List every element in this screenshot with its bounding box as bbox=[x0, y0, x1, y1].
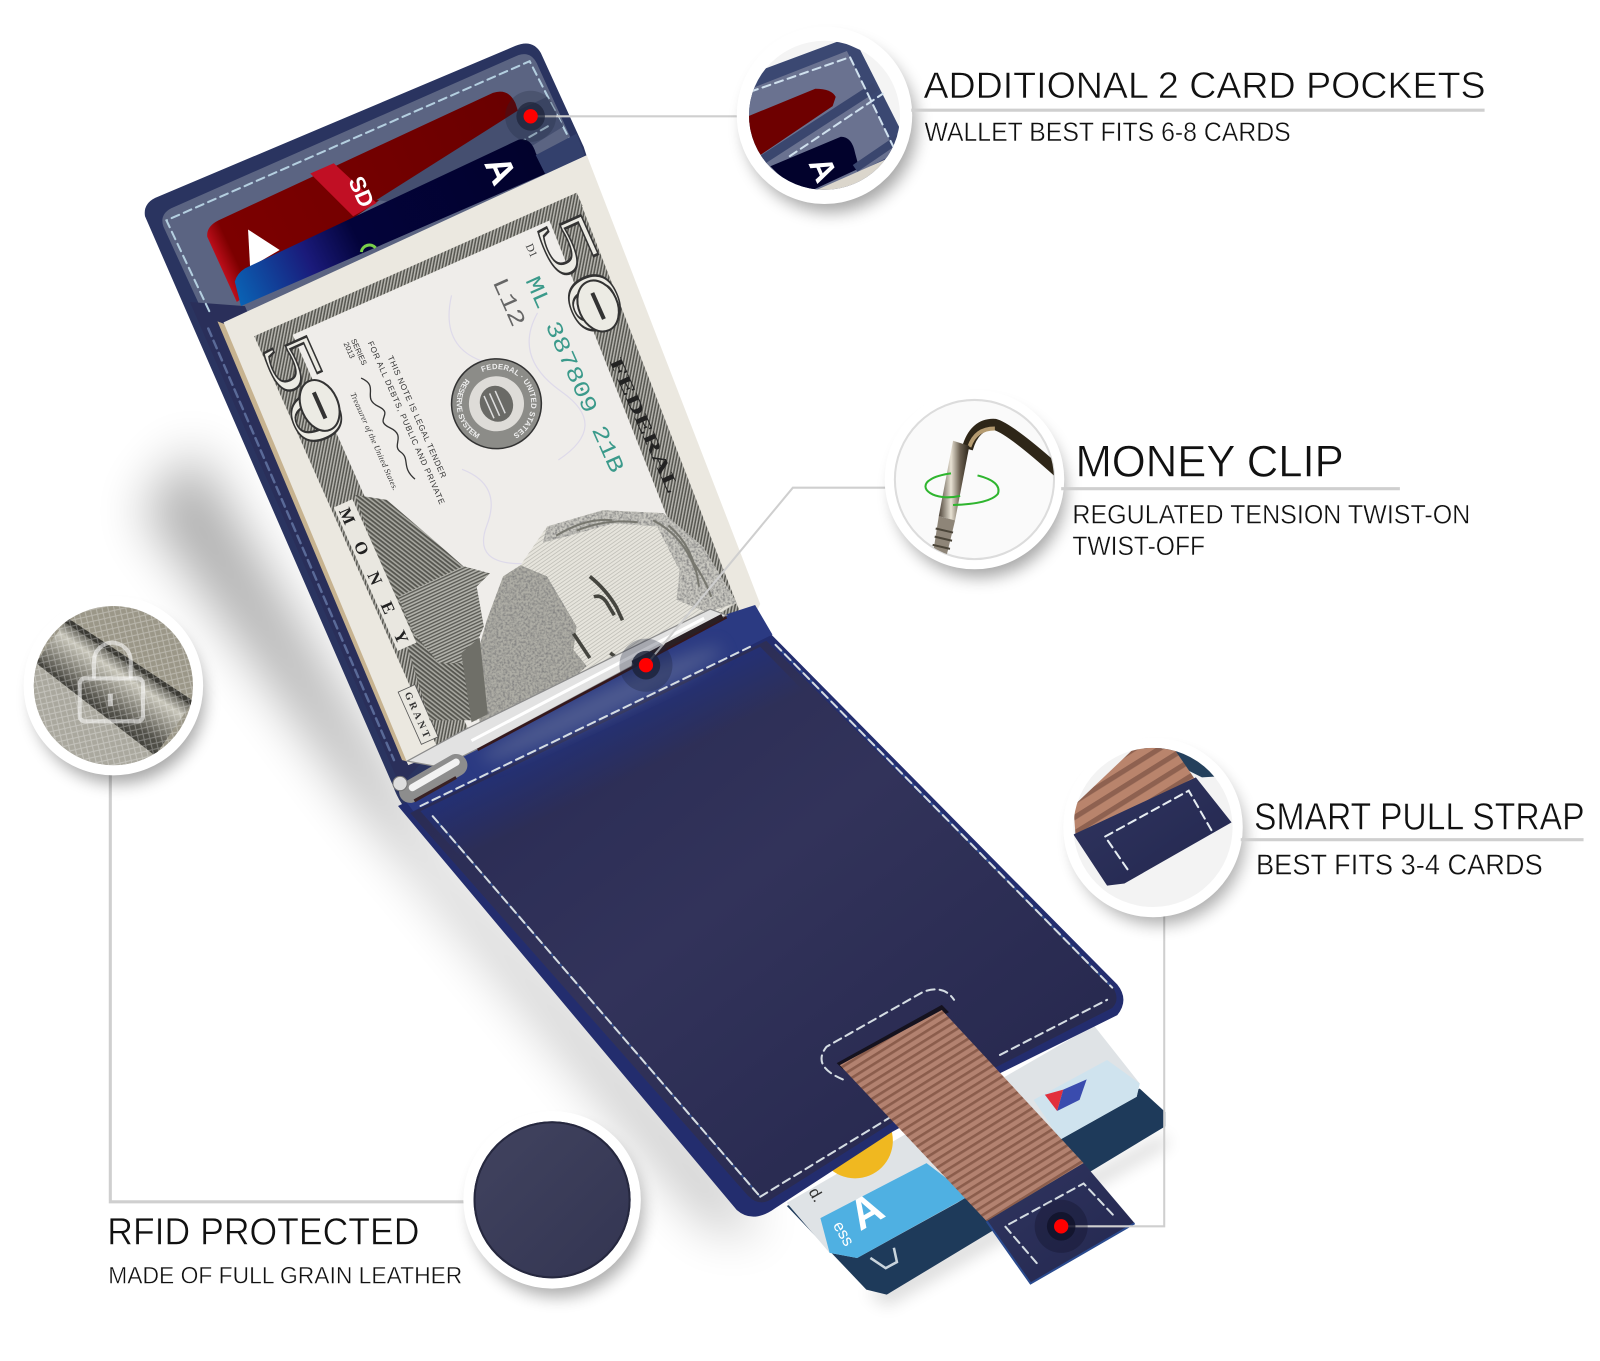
signature bbox=[361, 374, 417, 482]
pale blue band right bbox=[1034, 1060, 1140, 1140]
connector line: pull strap bbox=[1061, 908, 1164, 1226]
portrait coat bbox=[355, 495, 490, 720]
navy card bbox=[235, 139, 546, 306]
series: 2013 bbox=[342, 341, 357, 360]
portrait face bbox=[475, 510, 737, 723]
callout circle: card pockets bbox=[737, 27, 916, 212]
legal tender line 2: FOR ALL DEBTS, PUBLIC AND PRIVATE bbox=[366, 340, 446, 506]
bottom stitching bbox=[760, 1000, 1107, 1197]
district mark: D1 bbox=[523, 242, 539, 259]
money word strip over coat edge: MONEY bbox=[335, 505, 412, 647]
portrait beard bbox=[479, 565, 587, 722]
lower pocket strip bbox=[536, 134, 585, 175]
federal lettering: FEDERAL bbox=[606, 355, 683, 496]
red marker: money clip bbox=[619, 639, 672, 692]
connector line: money clip bbox=[646, 488, 888, 665]
outer leather shell bbox=[145, 44, 612, 816]
heading: money clip: MONEY CLIP bbox=[1075, 435, 1344, 486]
seal bbox=[450, 358, 542, 450]
header rule: money clip bbox=[1061, 487, 1400, 490]
heading: RFID protected: RFID PROTECTED bbox=[107, 1211, 419, 1253]
pull strap bbox=[840, 1010, 1135, 1283]
flag mark bbox=[1045, 1079, 1087, 1111]
large numeral top: 50 bbox=[520, 199, 644, 348]
dark card glyph bbox=[870, 1248, 897, 1268]
red marker: pull strap bbox=[1035, 1200, 1088, 1253]
connector line: RFID protection bbox=[110, 765, 471, 1202]
callout circle: leather swatch bbox=[463, 1111, 643, 1297]
front panel of wallet bbox=[393, 605, 1123, 1217]
pocket stitching bbox=[449, 124, 551, 184]
credit cards under wallet bbox=[787, 1025, 1165, 1295]
inner lining bbox=[162, 54, 578, 337]
red card stripe bbox=[310, 163, 377, 216]
card small text: ess bbox=[829, 1218, 857, 1249]
portrait hair bbox=[543, 510, 736, 611]
strap tab bbox=[987, 1163, 1135, 1283]
left leather strip bbox=[190, 302, 429, 786]
strap tab edge bbox=[987, 1221, 1135, 1283]
green rotation arrow bbox=[925, 473, 999, 505]
left engraved band bbox=[254, 322, 470, 748]
panel edge bbox=[398, 631, 1123, 1217]
serial number: ML 387809 21B bbox=[519, 273, 629, 477]
navy card green mark bbox=[361, 245, 376, 252]
subtext: regulated tension: REGULATED TENSION TWIST-ON bbox=[1072, 499, 1470, 529]
money clip bar bbox=[393, 609, 727, 801]
callout circle: lock RFID shield bbox=[24, 596, 204, 784]
upper pocket band bbox=[377, 97, 563, 204]
portrait eye and brow bbox=[574, 576, 622, 659]
wallet drop shadow bbox=[143, 449, 1169, 1306]
portrait lapel bbox=[398, 566, 490, 663]
connector line: card pockets bbox=[531, 115, 739, 117]
red marker: card pockets bbox=[505, 91, 556, 142]
seal: RESERVE SYSTEM bbox=[456, 378, 480, 438]
seal: FEDERAL · UNITED STATES bbox=[481, 364, 536, 438]
callout circle: money clip bbox=[885, 390, 1065, 577]
grant label: GRANT bbox=[402, 691, 432, 740]
red card lettering: SD bbox=[343, 172, 379, 211]
card fragment text: d. bbox=[805, 1185, 827, 1205]
subtext: twist off: TWIST-OFF bbox=[1072, 531, 1205, 561]
watermark lines bbox=[385, 266, 629, 577]
bill paper edge bbox=[217, 321, 413, 763]
grant label bbox=[398, 685, 438, 744]
right side stitching bbox=[776, 645, 1112, 988]
treasurer title: Treasurer of the United States. bbox=[348, 391, 400, 492]
oval on top numeral bbox=[570, 274, 627, 338]
red card logo bbox=[248, 230, 280, 267]
top stitching bbox=[166, 61, 577, 311]
dark card bbox=[787, 1089, 1165, 1295]
header rule: card pockets bbox=[911, 109, 1485, 112]
strap ribbon bbox=[840, 1010, 1084, 1221]
strap tab stitching bbox=[1005, 1183, 1113, 1263]
blue card band left bbox=[820, 1163, 969, 1258]
portrait tie bbox=[461, 638, 488, 722]
callout circle: pull strap bbox=[1063, 738, 1245, 924]
large numeral left: 50 bbox=[246, 321, 364, 458]
subtext: leather: MADE OF FULL GRAIN LEATHER bbox=[108, 1262, 462, 1289]
fifty dollar bill bbox=[218, 155, 760, 766]
red card bbox=[207, 92, 518, 302]
oval on left numeral bbox=[292, 374, 347, 437]
strap slot stitching bbox=[822, 989, 954, 1079]
yellow disc bbox=[817, 1103, 893, 1178]
right engraved band bbox=[527, 193, 760, 627]
letter code: L12 bbox=[486, 274, 530, 331]
bill paper face bbox=[224, 155, 760, 765]
strap slot bbox=[837, 1005, 949, 1069]
left side stitching bbox=[433, 816, 760, 1197]
legal tender line 1: THIS NOTE IS LEGAL TENDER bbox=[386, 354, 448, 479]
left stitching bbox=[208, 329, 394, 760]
top ribbon bbox=[256, 193, 583, 348]
fold stitching bbox=[420, 647, 750, 806]
wallet back panel with pockets bbox=[145, 44, 612, 816]
navy card glyph: A bbox=[476, 150, 525, 191]
light card bbox=[787, 1025, 1140, 1258]
bill printed content bbox=[246, 192, 740, 745]
series: SERIES bbox=[349, 337, 369, 367]
lock icon bbox=[80, 643, 143, 721]
card letter: A bbox=[841, 1183, 892, 1240]
panel face bbox=[410, 641, 1117, 1202]
watermark area bbox=[291, 220, 728, 735]
subtext: wallet fit: WALLET BEST FITS 6-8 CARDS bbox=[924, 117, 1291, 147]
subtext: strap fit: BEST FITS 3-4 CARDS bbox=[1256, 849, 1543, 881]
fold gloss below stitching bbox=[420, 647, 816, 867]
fold strip bbox=[406, 605, 772, 811]
header rule: pull strap bbox=[1241, 838, 1584, 841]
worn fold patch bbox=[476, 636, 728, 772]
heading: additional card pockets: ADDITIONAL 2 CARD POCKETS bbox=[923, 65, 1486, 106]
callout circle: card pockets: A bbox=[802, 151, 845, 188]
